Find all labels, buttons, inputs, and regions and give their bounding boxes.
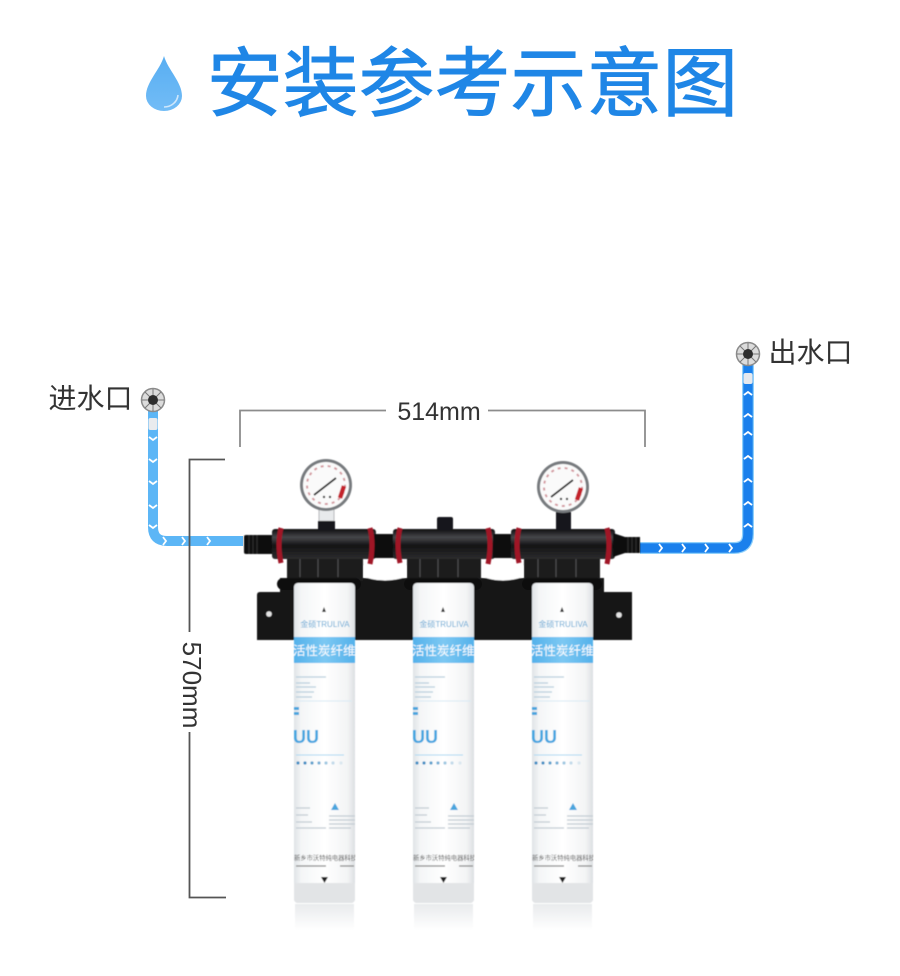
filter cartridge 3: 活性炭纤维滤	[531, 644, 607, 658]
dimension: width 514mm: 514mm	[397, 398, 481, 426]
mounting bracket	[257, 578, 632, 640]
label: outlet: 出水口	[768, 337, 853, 368]
icon: outlet valve	[736, 342, 760, 366]
white gaps between heads	[364, 566, 406, 580]
red seal rings	[279, 528, 609, 564]
pressure gauge 2	[537, 461, 589, 530]
filter cartridge 3: 金硕TRULIVA	[538, 619, 588, 629]
outlet pipe	[640, 365, 752, 552]
filter cartridge 3: UU	[531, 727, 557, 747]
filter cartridge 2	[412, 582, 475, 904]
filter cartridge 1	[293, 582, 356, 904]
filter head 3	[522, 553, 602, 590]
pressure gauge 1	[300, 459, 352, 530]
filter cartridge 1: UU	[293, 727, 319, 747]
icon: water drop	[146, 56, 182, 111]
label: inlet: 进水口	[48, 383, 133, 414]
dimension: width 514mm	[240, 398, 645, 447]
filter head 2	[404, 553, 482, 590]
filter cartridge 2: 新乡市沃特纯电器科技有限公司	[413, 853, 501, 862]
filter cartridge 3: 新乡市沃特纯电器科技有限公司	[532, 853, 620, 862]
filter cartridge 1: 活性炭纤维滤	[293, 644, 369, 658]
filter cartridge 3	[531, 582, 594, 904]
inlet pipe	[148, 410, 243, 545]
filter cartridge 2: UU	[412, 727, 438, 747]
title group	[146, 22, 738, 132]
manifold	[244, 517, 640, 564]
filter head 1	[277, 553, 363, 590]
filter unit	[244, 459, 640, 903]
cartridge reflections	[295, 904, 592, 930]
dimension: height 570mm	[177, 460, 226, 898]
dimension: height 570mm: 570mm	[177, 642, 207, 728]
filter cartridge 1: 金硕TRULIVA	[300, 619, 350, 629]
filter cartridge 1: 新乡市沃特纯电器科技有限公司	[294, 853, 382, 862]
filter cartridge 2: 金硕TRULIVA	[419, 619, 469, 629]
title: 安装参考示意图	[207, 22, 738, 132]
icon: inlet valve	[142, 388, 164, 412]
filter cartridge 2: 活性炭纤维滤	[412, 644, 488, 658]
